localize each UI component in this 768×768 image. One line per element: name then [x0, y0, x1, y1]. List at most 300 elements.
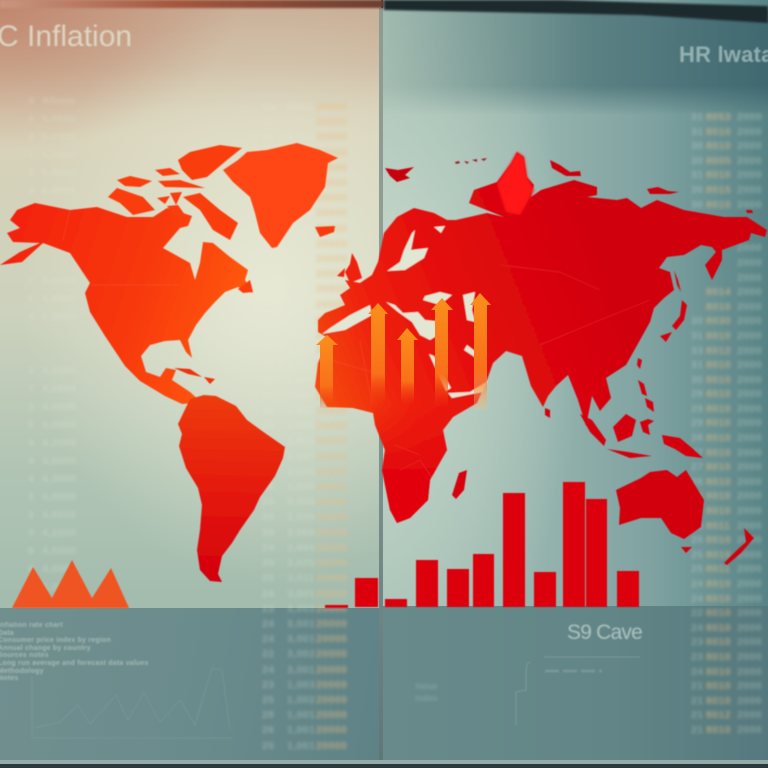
table: left screen right highlight column: 20000: [316, 496, 347, 508]
table: right screen values column: 2000: [737, 724, 762, 736]
bar 1: [325, 605, 348, 608]
table: right screen index column: 27: [691, 461, 703, 473]
table: left screen values column: 4,0500: [42, 401, 77, 413]
table: left screen right index column: 27: [262, 344, 274, 356]
table: left screen right number column: 3,010: [287, 131, 315, 143]
table: left screen right highlight column: 20000: [316, 557, 347, 569]
table: left screen right index column: [262, 101, 277, 752]
table: right screen highlight column: 8010: [706, 461, 731, 473]
chart: orange triangles: [12, 560, 129, 608]
table: left screen right number column: 2,801: [287, 405, 315, 417]
table: left screen right index column: 25: [262, 557, 274, 569]
arrow 1: [316, 335, 338, 408]
table: left screen values column: 5,0000: [42, 311, 77, 323]
table: left screen right highlight column: 20000: [316, 740, 347, 752]
panel: left header band: [88, 8, 379, 76]
table: right screen values column: 2000: [737, 344, 762, 356]
table: left screen right index column: 25: [262, 496, 274, 508]
table: right screen highlight column: 8010: [706, 490, 731, 502]
table: left screen right highlight column: 20000: [316, 314, 347, 326]
table: right screen values column: 2000: [737, 417, 762, 429]
table: left screen values column: 4,0600: [42, 383, 77, 395]
table: right screen highlight column: 8010: [706, 534, 731, 546]
table: left screen index column: 2: [28, 149, 34, 161]
table: left screen index column: 4: [28, 95, 34, 107]
table: right screen highlight column: 8010: [706, 330, 731, 342]
table: right screen index column: 30: [691, 199, 703, 211]
table: right screen highlight column: [704, 111, 732, 736]
table: left screen right number column: 3,001: [287, 588, 315, 600]
title: lower right chart: S9 Cave: [567, 621, 642, 644]
table: left screen values column: 4,0000: [42, 419, 77, 431]
bar 6: [473, 554, 494, 607]
table: left screen index column: 4: [28, 185, 34, 197]
table: right screen values column: 2000: [737, 155, 762, 167]
map: Severnaya Zemlya: [550, 160, 581, 176]
table: left screen right number column: 3,022: [287, 207, 315, 219]
table: left screen right index column: 30: [262, 223, 274, 235]
table: left screen right index column: 24: [262, 435, 274, 447]
title: left screen: C Inflation: [0, 20, 132, 53]
table: right screen index column: 30: [691, 155, 703, 167]
table: left screen right number column: 3,001: [287, 664, 315, 676]
table: right screen highlight column: 8011: [706, 563, 730, 575]
arrow 5: [470, 293, 491, 410]
text block: lower left notes: Consumer price index by region: [0, 637, 111, 644]
table: right screen highlight column: 8010: [706, 636, 731, 648]
map: seas and inland water: [322, 226, 488, 398]
water: Mediterranean east: [386, 302, 445, 340]
table: right screen highlight column: 8030: [706, 315, 731, 327]
table: left screen right index column: 25: [262, 375, 274, 387]
table: left screen right number column: 3,021: [287, 314, 315, 326]
table: left screen right highlight column: 20000: [316, 162, 347, 174]
table: right screen highlight column: 8010: [706, 199, 731, 211]
table: right screen values column: 2000: [737, 563, 762, 575]
island: Newfoundland: [238, 280, 253, 293]
table: right screen index column: 30: [691, 315, 703, 327]
table: left screen right highlight column: 20000: [316, 588, 347, 600]
table: right screen index column: 31: [691, 359, 703, 371]
table: right screen highlight column: 8010: [706, 417, 731, 429]
map: Tasmania: [681, 547, 692, 553]
table: left screen right number column: 2,006: [287, 527, 315, 539]
table: left screen right highlight column: 20000: [316, 344, 347, 356]
table: left screen right index column: 24: [262, 588, 274, 600]
table: left screen right number column: 2,807: [287, 390, 315, 402]
table: left screen right number column: 3,002: [287, 648, 315, 660]
table: right screen highlight column: 8015: [706, 184, 731, 196]
table: left screen right number column: 2,404: [287, 542, 315, 554]
water: Gulf of Aden: [448, 381, 488, 398]
table: right screen index column: 24: [691, 578, 703, 590]
table: left screen index column: 7: [28, 383, 34, 395]
table: left screen values column: [42, 95, 77, 593]
table: left screen right index column: 30: [262, 253, 274, 265]
map: Novaya Zemlya glow: [497, 152, 534, 215]
table: left screen right highlight column: 20000: [316, 147, 347, 159]
table: right screen highlight column: 8012: [706, 344, 731, 356]
table: left screen values column: 8,0000: [42, 275, 77, 287]
table: left screen index column: 3: [28, 131, 34, 143]
table: left screen right highlight column: 20000: [316, 481, 347, 493]
table: left screen right highlight column: 20000: [316, 618, 347, 630]
table: right screen index column: 25: [691, 563, 703, 575]
table: left screen index column: 6: [28, 275, 34, 287]
table: right screen values column: 2000: [737, 257, 762, 269]
table: left screen index column: 3: [28, 509, 34, 521]
table: left screen right index column: 31: [262, 314, 274, 326]
table: left screen right highlight column: 20000: [316, 405, 347, 417]
table: left screen right index column: 24: [262, 542, 274, 554]
map: Africa Madagascar: [452, 470, 467, 499]
table: right screen values column: 2000: [737, 184, 762, 196]
arrow 2: [368, 303, 388, 404]
table: left screen right highlight column: 20000: [316, 131, 347, 143]
map: Svalbard: [385, 167, 414, 182]
table: left screen right index column: 31: [262, 131, 274, 143]
table: right screen values column: 2000: [737, 242, 762, 254]
table: left screen right number column: 3,001: [287, 618, 315, 630]
table: right screen index column: 26: [691, 490, 703, 502]
table: left screen right highlight column: 20000: [316, 679, 347, 691]
table: left screen right number column: 2,097: [287, 283, 315, 295]
table: right screen highlight column: 8010: [706, 622, 731, 634]
island: Java: [607, 449, 652, 458]
table: right screen values column: 2000: [737, 622, 762, 634]
table: right screen index column: 30: [691, 140, 703, 152]
table: left screen right number column: 2,506: [287, 481, 315, 493]
table: right screen highlight column: 8010: [706, 447, 731, 459]
bar 7: [503, 493, 525, 607]
map: faint borders: [63, 210, 650, 478]
table: right screen values column: 2000: [737, 140, 762, 152]
water: Caspian Sea: [463, 292, 475, 322]
table: right screen highlight column: 8010: [706, 126, 731, 138]
table: left screen right number column: 3,011: [287, 572, 315, 584]
table: right screen index column: 27: [691, 505, 703, 517]
table: left screen right number column: [287, 101, 315, 752]
table: right screen highlight column: 8010: [706, 680, 731, 692]
table: right screen values column: 2000: [737, 301, 762, 313]
table: right screen highlight column: 8010: [706, 549, 731, 561]
table: right screen highlight column: 8010: [706, 301, 731, 313]
table: right screen values column: 2000: [737, 432, 762, 444]
table: left screen right index column: 26: [262, 527, 274, 539]
table: left screen values column: 4,5000: [42, 293, 77, 305]
bottom bezel: [0, 764, 768, 768]
table: left screen right number column: 3,012: [287, 162, 315, 174]
table: right screen values column: 2000: [737, 374, 762, 386]
table: right screen index column: 22: [691, 607, 703, 619]
table: left screen right index column: 27: [262, 283, 274, 295]
table: right screen values column: 2000: [737, 607, 762, 619]
table: right screen values column: 2000: [737, 286, 762, 298]
text block: lower left notes: Annual change by country: [0, 645, 91, 652]
chart: faint lower left line chart: [32, 668, 232, 738]
table: left screen values column: 4,2000: [42, 527, 77, 539]
table: left screen index column: 3: [28, 527, 34, 539]
map: New Zealand: [724, 528, 754, 565]
bar 10: [586, 499, 607, 607]
table: right screen index column: 24: [691, 666, 703, 678]
map: Japan and Sakhalin: [660, 270, 687, 342]
table: right screen highlight column: 8010: [706, 578, 731, 590]
table: left screen right index column: 31: [262, 192, 274, 204]
table: right screen index column: 30: [691, 374, 703, 386]
panel: lower right band: [383, 606, 768, 762]
table: right screen index column: 29: [691, 403, 703, 415]
table: right screen values column: 2000: [737, 651, 762, 663]
map: Caribbean islands: [174, 368, 215, 384]
table: right screen values column: 2000: [737, 315, 762, 327]
table: right screen index column: 23: [691, 636, 703, 648]
table: left screen values column: 4,5000: [42, 455, 77, 467]
table: left screen right highlight column: 20000: [316, 694, 347, 706]
island: Sumatra: [580, 414, 606, 446]
bar 9: [563, 482, 585, 607]
island: Baffin: [183, 193, 238, 240]
table: right screen index column: 21: [691, 709, 703, 721]
table: right screen index column: 21: [691, 724, 703, 736]
table: left screen right index column: 33: [262, 147, 274, 159]
table: left screen index column: 4: [28, 437, 34, 449]
table: right screen values column: 2000: [737, 461, 762, 473]
island: Ellesmere: [178, 145, 242, 180]
panel: right screen background: [383, 0, 768, 768]
table: right screen values column: 2000: [737, 593, 762, 605]
table: left screen index column: 3: [28, 365, 34, 377]
table: right screen index column: 25: [691, 549, 703, 561]
table: left screen right number column: 1,002: [287, 694, 315, 706]
table: right screen index column: 29: [691, 388, 703, 400]
table: left screen right highlight column: 20000: [316, 101, 347, 113]
table: right screen highlight column: 8010: [706, 359, 731, 371]
table: right screen values column: 2000: [737, 505, 762, 517]
table: left screen right highlight column: 20000: [316, 359, 347, 371]
panel: left screen background: [0, 0, 381, 768]
table: left screen right index column: 28: [262, 709, 274, 721]
text block: lower left notes: [0, 622, 149, 682]
table: left screen right index column: 23: [262, 603, 274, 615]
table: left screen values column: 5,0700: [42, 131, 77, 143]
table: left screen right index column: 24: [262, 664, 274, 676]
table: right screen index column: 30: [691, 184, 703, 196]
table: left screen right number column: 2,307: [287, 451, 315, 463]
table: left screen right highlight column: 20000: [316, 542, 347, 554]
table: left screen values column: 4,2000: [42, 437, 77, 449]
table: right screen highlight column: 8010: [706, 169, 731, 181]
table: right screen highlight column: 8010: [706, 607, 731, 619]
table: left screen right highlight column: 20000: [316, 420, 347, 432]
table: left screen values column: 4,0500: [42, 509, 77, 521]
table: left screen right number column: 3,003: [287, 603, 315, 615]
table: left screen right highlight column: 20000: [316, 724, 347, 736]
table: left screen right index column: 26: [262, 724, 274, 736]
table: right screen highlight column: 8005: [706, 155, 731, 167]
table: left screen right number column: 3,009: [287, 268, 315, 280]
map: United Kingdom and Ireland: [337, 253, 362, 283]
table: left screen values column: 4,2000: [42, 365, 77, 377]
bar 2: [355, 578, 378, 607]
table: left screen right number column: 2,025: [287, 511, 315, 523]
table: right screen index column: 23: [691, 651, 703, 663]
chart: faint lower right axis: [516, 657, 640, 725]
table: right screen highlight column: 8010: [706, 505, 731, 517]
table: left screen index column: 2: [28, 167, 34, 179]
bar 8: [534, 572, 556, 607]
chart: rising arrows: [316, 293, 491, 410]
table: left screen index column: 3: [28, 113, 34, 125]
table: right screen values column: 2000: [737, 709, 762, 721]
bottom bezel highlight: [0, 760, 768, 764]
map: Franz Josef dots: [455, 158, 487, 164]
water: Mediterranean west: [322, 305, 372, 334]
table: left screen right index column: 31: [262, 162, 274, 174]
table: left screen right number column: 3,032: [287, 147, 315, 159]
table: left screen right highlight column: 20000: [316, 299, 347, 311]
table: right screen index column: 21: [691, 695, 703, 707]
table: left screen right number column: 1,001: [287, 740, 315, 752]
table: right screen values column: 2000: [737, 199, 762, 211]
map: Southeast Asia islands: [545, 358, 703, 458]
map: North America: [0, 203, 253, 404]
table: left screen index column: 6: [28, 545, 34, 557]
table: right screen highlight column: 8010: [706, 666, 731, 678]
table: left screen right highlight column: 20000: [316, 268, 347, 280]
top bezel right: [384, 0, 768, 23]
table: left screen right index column: 26: [262, 466, 274, 478]
table: right screen values column: 2000: [737, 330, 762, 342]
table: left screen right index column: 28: [262, 299, 274, 311]
island: Borneo: [613, 414, 636, 442]
table: left screen right index column: 29: [262, 268, 274, 280]
table: right screen values column: [737, 111, 762, 736]
map: Eurasia and Africa: [315, 152, 767, 523]
table: left screen right index column: 25: [262, 694, 274, 706]
table: left screen right highlight column: 20000: [316, 238, 347, 250]
table: left screen index column: 8: [28, 563, 34, 575]
table: right screen index column: 31: [691, 126, 703, 138]
table: left screen values column: 4,2000: [42, 473, 77, 485]
map: South America: [178, 395, 285, 582]
table: left screen right number column: 2,508: [287, 420, 315, 432]
table: left screen values column: 5,0500: [42, 113, 77, 125]
table: right screen values column: 2000: [737, 534, 762, 546]
table: left screen right number column: 2,403: [287, 435, 315, 447]
table: left screen right highlight column: 20000: [316, 375, 347, 387]
table: right screen values column: 2000: [737, 272, 762, 284]
table: right screen highlight column: 8053: [706, 111, 731, 123]
table: left screen right index column: 23: [262, 679, 274, 691]
table: right screen values column: 2000: [737, 578, 762, 590]
bar 5: [447, 569, 469, 607]
table: right screen values column: 2000: [737, 666, 762, 678]
table: left screen index column: [28, 95, 34, 593]
table: left screen right number column: 1,003: [287, 679, 315, 691]
table: right screen index column: [691, 111, 704, 736]
text block: lower left notes: Long run average and forecast data values: [0, 660, 149, 667]
text block: lower centre label: [415, 682, 438, 703]
table: left screen right number column: 2,106: [287, 466, 315, 478]
table: left screen right highlight column: 20000: [316, 177, 347, 189]
table: right screen highlight column: 8014: [706, 286, 731, 298]
table: right screen highlight column: 8010: [706, 403, 731, 415]
table: left screen right number column: 2,005: [287, 496, 315, 508]
island: New Guinea: [662, 435, 703, 458]
table: left screen right number column: 3,001: [287, 329, 315, 341]
water: Red Sea: [429, 354, 451, 391]
island: Victoria: [108, 188, 155, 215]
table: left screen right highlight column: 20000: [316, 451, 347, 463]
table: left screen right number column: 1,001: [287, 709, 315, 721]
island: small north group: [117, 168, 205, 222]
table: left screen right index column: 28: [262, 420, 274, 432]
table: right screen index column: 31: [691, 330, 703, 342]
table: left screen right number column: 2,907: [287, 344, 315, 356]
table: right screen index column: 21: [691, 680, 703, 692]
table: left screen right index column: 26: [262, 481, 274, 493]
table: left screen values column: 1,2000: [42, 581, 77, 593]
table: left screen right index column: 25: [262, 511, 274, 523]
table: right screen index column: 31: [691, 111, 703, 123]
table: left screen right highlight column: 20000: [316, 390, 347, 402]
table: left screen index column: 5: [28, 419, 34, 431]
table: right screen index column: 31: [691, 169, 703, 181]
table: left screen values column: 5,2400: [42, 149, 77, 161]
island: Taiwan: [637, 358, 642, 369]
table: right screen values column: 2000: [737, 680, 762, 692]
table: left screen right highlight column: 20000: [316, 633, 347, 645]
table: left screen right highlight column: 20000: [316, 435, 347, 447]
table: left screen right highlight column: 20000: [316, 572, 347, 584]
map: New Siberian Islands: [647, 187, 753, 213]
chart: red bars: [325, 482, 639, 608]
island: Philippines: [638, 380, 654, 412]
table: right screen values column: 2000: [737, 549, 762, 561]
table: left screen right highlight column: 20000: [316, 603, 347, 615]
arrow 4: [431, 298, 453, 406]
table: left screen index column: 3: [28, 401, 34, 413]
divider between screens: [379, 8, 383, 764]
table: left screen right highlight column: 20000: [316, 527, 347, 539]
map: Iceland: [315, 226, 335, 237]
table: left screen right index column: 31: [262, 116, 274, 128]
table: left screen right index column: No: [262, 101, 277, 113]
table: right screen index column: 26: [691, 520, 703, 532]
table: right screen values column: 2000: [737, 490, 762, 502]
table: left screen values column: 4,0000: [42, 563, 77, 575]
table: left screen right number column: 3,010: [287, 116, 315, 128]
table: left screen right index column: 31: [262, 207, 274, 219]
table: right screen index column: 26: [691, 476, 703, 488]
water: Black Sea: [423, 292, 452, 305]
table: left screen right number column: 3,025: [287, 557, 315, 569]
table: left screen right highlight column: 20000: [316, 329, 347, 341]
table: left screen right number column: 2,038: [287, 299, 315, 311]
table: right screen values column: 2000: [737, 476, 762, 488]
table: right screen highlight column: 8012: [706, 709, 731, 721]
table: left screen right number column: 2,905: [287, 375, 315, 387]
table: right screen values column: 2000: [737, 403, 762, 415]
table: left screen right number column: 3,010: [287, 253, 315, 265]
water: Persian Gulf: [464, 345, 480, 358]
table: left screen right number column: 1,001: [287, 724, 315, 736]
table: right screen index column: 24: [691, 622, 703, 634]
table: left screen values column: 5,0000: [42, 167, 77, 179]
table: left screen values column: 4,5000: [42, 545, 77, 557]
table: right screen values column: 2000: [737, 447, 762, 459]
